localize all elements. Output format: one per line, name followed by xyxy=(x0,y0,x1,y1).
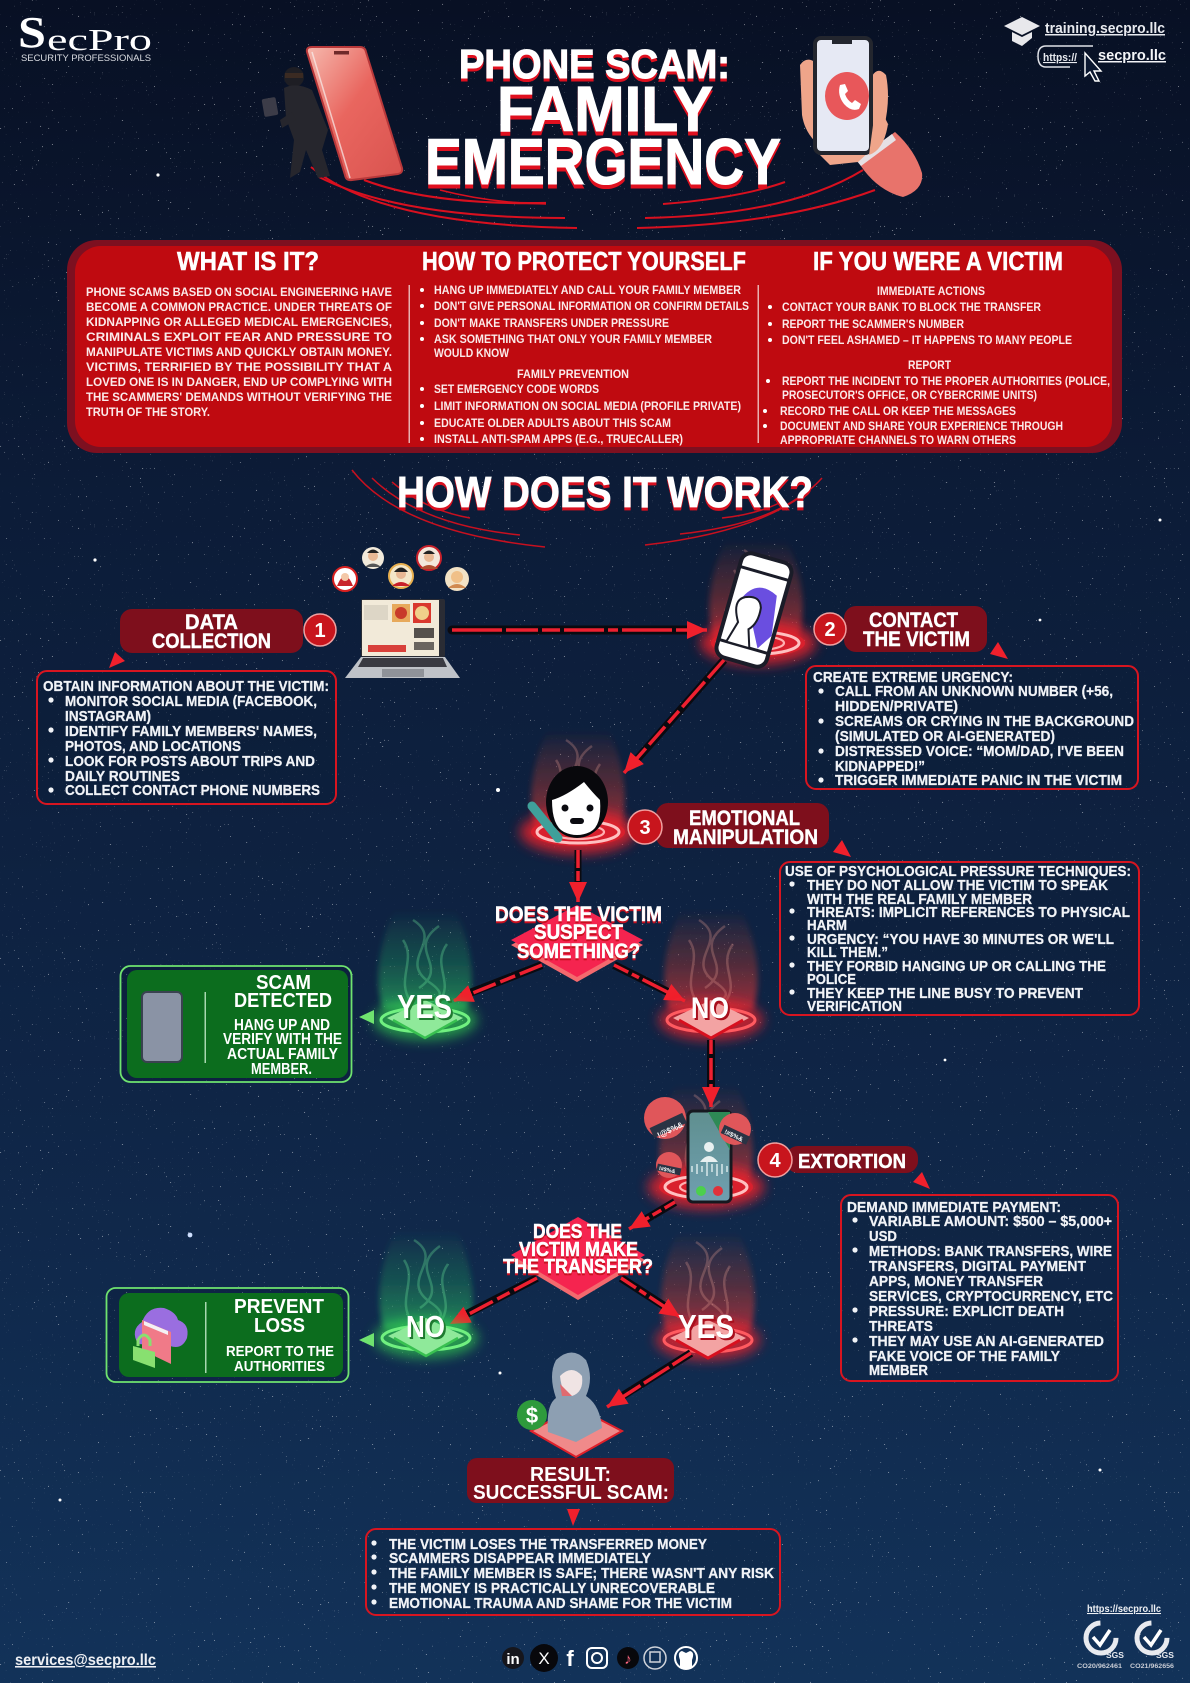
title xyxy=(425,41,781,198)
icon: x: X xyxy=(538,1649,550,1668)
column: how to protect yourself: SET EMERGENCY CODE WORDS xyxy=(434,384,599,396)
icon: browser url box xyxy=(1038,46,1093,67)
website links: https:// xyxy=(1043,52,1077,64)
title: FAMILY xyxy=(497,73,713,145)
result label: SUCCESSFUL SCAM: xyxy=(473,1482,669,1504)
column: if you were a victim: DON'T FEEL ASHAMED – IT HAPPENS TO MANY PEOPLE xyxy=(782,335,1072,347)
step 1 label: data collection: COLLECTION xyxy=(152,630,271,653)
panel: scam detected: MEMBER. xyxy=(251,1061,312,1078)
column: how to protect yourself: INSTALL ANTI-SPAM APPS (E.G., TRUECALLER) xyxy=(434,434,683,446)
column: what is it: THE SCAMMERS' DEMANDS WITHOUT VERIFYING THE xyxy=(86,392,392,404)
number badge 1: 1 xyxy=(314,620,326,642)
text box: step 4 details: PRESSURE: EXPLICIT DEATH xyxy=(869,1303,1064,1320)
contact email: services@secpro.llc xyxy=(15,1652,156,1669)
column: if you were a victim: REPORT THE SCAMMER'S NUMBER xyxy=(782,319,965,331)
decorative arcs under title xyxy=(311,167,875,228)
arrow: no to extortion xyxy=(707,1040,715,1107)
text box: step 2 details: HIDDEN/PRIVATE) xyxy=(835,698,958,715)
icon: linkedin: in xyxy=(506,1651,520,1668)
column: how to protect yourself: LIMIT INFORMATION ON SOCIAL MEDIA (PROFILE PRIVATE) xyxy=(434,401,741,413)
column: what is it xyxy=(86,246,392,419)
step 2 label: contact the victim xyxy=(814,606,987,652)
step 1 label: data collection xyxy=(120,609,336,653)
text box: step 3 details xyxy=(780,862,1139,1015)
icon: hooded scammer with money xyxy=(517,1352,622,1457)
text box: step 2 details: KIDNAPPED!” xyxy=(835,758,925,775)
text box: step 4 details: VARIABLE AMOUNT: $500 – $5,000+ xyxy=(869,1213,1112,1230)
text box: step 3 details: VERIFICATION xyxy=(807,998,902,1015)
social media icons xyxy=(502,1644,697,1672)
text box: step 3 details: THREATS: IMPLICIT REFERENCES TO PHYSICAL xyxy=(807,904,1130,921)
result label: RESULT: xyxy=(530,1464,611,1486)
step 3 label: emotional manipulation xyxy=(628,803,829,849)
badge 2 xyxy=(1130,1623,1174,1670)
decision: does the victim suspect something: DOES THE VICTIM xyxy=(495,903,662,926)
column: if you were a victim: REPORT xyxy=(908,360,951,372)
panel: prevent loss: AUTHORITIES xyxy=(234,1358,325,1375)
text box: step 2 details: DISTRESSED VOICE: “MOM/DAD, I'VE BEEN xyxy=(835,743,1124,760)
text box: step 4 details: APPS, MONEY TRANSFER xyxy=(869,1273,1043,1290)
pointer: step 1 xyxy=(109,652,125,668)
text box: step 3 details: THEY FORBID HANGING UP OR CALLING THE xyxy=(807,958,1106,975)
angry faces: !#$%& xyxy=(658,1166,676,1175)
text box: result details: SCAMMERS DISAPPEAR IMMEDIATELY xyxy=(389,1550,651,1567)
certifications xyxy=(1077,1603,1174,1670)
text box: step 4 details: FAKE VOICE OF THE FAMILY xyxy=(869,1348,1060,1365)
column: how to protect yourself: FAMILY PREVENTION xyxy=(517,369,629,381)
outcome node: no: NO xyxy=(691,992,729,1025)
text box: step 1 details: IDENTIFY FAMILY MEMBERS' NAMES, xyxy=(65,723,317,740)
arrow: extortion to transfer decision xyxy=(629,1202,675,1229)
icon: mouse cursor xyxy=(1085,53,1101,81)
icon: facebook: f xyxy=(566,1646,574,1671)
website links xyxy=(1004,17,1166,81)
arrows: second decision branches xyxy=(450,1278,680,1324)
giant phone xyxy=(307,47,402,180)
icon: graduation cap xyxy=(1004,17,1040,46)
column: if you were a victim: RECORD THE CALL OR KEEP THE MESSAGES xyxy=(780,406,1016,418)
panel: prevent loss: LOSS xyxy=(254,1315,305,1337)
title: EMERGENCY xyxy=(425,125,781,198)
text box: step 3 details: KILL THEM.” xyxy=(807,944,888,961)
text box: step 2 details: SCREAMS OR CRYING IN THE BACKGROUND xyxy=(835,713,1134,730)
arrow: yes to scammer xyxy=(607,1353,691,1407)
decision: does the victim make the transfer: DOES THE xyxy=(533,1221,622,1243)
column: what is it: BECOME A COMMON PRACTICE. UNDER THREATS OF xyxy=(86,302,392,314)
scammer figure xyxy=(262,67,330,178)
text box: step 1 details: COLLECT CONTACT PHONE NUMBERS xyxy=(65,782,320,799)
panel: prevent loss: PREVENT xyxy=(234,1296,324,1318)
decision: does the victim suspect something xyxy=(495,903,662,982)
website links: training.secpro.llc xyxy=(1045,20,1165,37)
logo: SecPro: SECURITY PROFESSIONALS xyxy=(21,53,151,64)
text box: step 1 details xyxy=(37,671,336,804)
column: how to protect yourself: EDUCATE OLDER ADULTS ABOUT THIS SCAM xyxy=(434,418,671,430)
pointer: to scam detected xyxy=(359,1010,374,1024)
angry faces: !#$%& xyxy=(723,1129,744,1144)
palm and fingers xyxy=(800,60,888,165)
step 4 label: extortion: EXTORTION xyxy=(798,1151,906,1173)
icon: laptop with data dashboard xyxy=(345,599,460,678)
column: if you were a victim: IMMEDIATE ACTIONS xyxy=(877,286,985,298)
heading: how does it work: HOW DOES IT WORK? xyxy=(397,468,813,517)
title: PHONE SCAM: xyxy=(459,41,730,87)
outcome node: yes xyxy=(373,988,477,1040)
column: how to protect yourself: DON'T GIVE PERSONAL INFORMATION OR CONFIRM DETAILS xyxy=(434,301,749,313)
panel: scam detected: ACTUAL FAMILY xyxy=(227,1046,339,1063)
number badge 1 xyxy=(304,614,336,646)
angry faces xyxy=(644,1097,751,1178)
call button xyxy=(825,72,869,120)
text box: step 3 details: THEY KEEP THE LINE BUSY TO PREVENT xyxy=(807,985,1083,1002)
badge 2: CO21/962656 xyxy=(1130,1663,1174,1670)
step 3 label: emotional manipulation: MANIPULATION xyxy=(673,826,818,849)
icon: phone call with angry threats xyxy=(644,1097,751,1202)
badge 2: SGS xyxy=(1156,1650,1174,1660)
text box: step 2 details: CALL FROM AN UNKNOWN NUMBER (+56, xyxy=(835,683,1113,700)
text box: result details: THE FAMILY MEMBER IS SAFE; THERE WASN'T ANY RISK xyxy=(389,1565,774,1582)
text box: step 3 details: URGENCY: “YOU HAVE 30 MINUTES OR WE'LL xyxy=(807,931,1114,948)
column: if you were a victim: CONTACT YOUR BANK TO BLOCK THE TRANSFER xyxy=(782,302,1042,314)
step 1 label: data collection: DATA xyxy=(185,611,238,634)
text box: result details xyxy=(366,1529,780,1615)
decision: does the victim make the transfer: VICTIM MAKE xyxy=(519,1239,638,1261)
column: how to protect yourself: HANG UP IMMEDIATELY AND CALL YOUR FAMILY MEMBER xyxy=(434,285,742,297)
step 3 label: emotional manipulation: EMOTIONAL xyxy=(689,807,800,830)
text box: step 4 details: TRANSFERS, DIGITAL PAYMENT xyxy=(869,1258,1086,1275)
decision: does the victim make the transfer xyxy=(503,1217,653,1300)
icon: phone xyxy=(142,992,182,1062)
text box: step 3 details: THEY DO NOT ALLOW THE VICTIM TO SPEAK xyxy=(807,877,1108,894)
column: if you were a victim: IF YOU WERE A VICTIM xyxy=(813,246,1063,276)
panel: scam detected: VERIFY WITH THE xyxy=(223,1031,342,1048)
number badge 4 xyxy=(758,1143,792,1177)
icon: github xyxy=(675,1647,697,1669)
column: how to protect yourself: ASK SOMETHING THAT ONLY YOUR FAMILY MEMBER xyxy=(434,334,713,346)
column: what is it: TRUTH OF THE STORY. xyxy=(86,407,210,419)
column: how to protect yourself: WOULD KNOW xyxy=(434,348,509,360)
icon: tiktok: ♪ xyxy=(624,1651,632,1668)
panel: scam detected: SCAM xyxy=(256,972,311,994)
logo: SecPro xyxy=(18,8,152,64)
column: if you were a victim: DOCUMENT AND SHARE YOUR EXPERIENCE THROUGH xyxy=(780,421,1063,433)
outcome node: yes: YES xyxy=(397,988,452,1025)
dollar badge: $ xyxy=(526,1403,538,1428)
column: how to protect yourself: HOW TO PROTECT YOURSELF xyxy=(422,246,746,276)
outcome node: no (transfer): NO xyxy=(406,1309,445,1344)
sleeve xyxy=(857,132,922,197)
text box: step 2 details xyxy=(806,666,1138,789)
pointer: step 3 xyxy=(833,840,851,857)
column: if you were a victim: PROSECUTOR'S OFFICE, OR CYBERCRIME UNITS) xyxy=(782,390,1037,402)
panel: scam detected: HANG UP AND xyxy=(234,1017,330,1034)
text box: step 4 details xyxy=(841,1195,1118,1381)
illustration: hand holding phone with call icon xyxy=(800,38,922,197)
text box: step 3 details: POLICE xyxy=(807,971,856,988)
column: what is it: KIDNAPPING OR ALLEGED MEDICAL EMERGENCIES, xyxy=(86,317,392,329)
auras and rings behind nodes xyxy=(378,540,816,1332)
column: how to protect yourself xyxy=(420,246,749,446)
column: if you were a victim: REPORT THE INCIDENT TO THE PROPER AUTHORITIES (POLICE, xyxy=(782,376,1110,388)
text box: step 3 details: USE OF PSYCHOLOGICAL PRESSURE TECHNIQUES: xyxy=(785,863,1131,880)
step 4 label: extortion xyxy=(758,1143,918,1177)
text box: step 4 details: USD xyxy=(869,1228,897,1245)
icon: x xyxy=(530,1644,558,1672)
decision: does the victim suspect something: SOMETHING? xyxy=(517,940,640,963)
decision: does the victim suspect something: SUSPECT xyxy=(534,921,623,944)
logo: SecPro: S xyxy=(18,8,46,57)
number badge 2: 2 xyxy=(824,619,836,641)
badge 1 xyxy=(1077,1623,1124,1670)
arrow: phone to victim xyxy=(624,660,724,773)
column: if you were a victim: APPROPRIATE CHANNELS TO WARN OTHERS xyxy=(780,435,1016,447)
panel: scam detected: DETECTED xyxy=(234,990,332,1012)
pointer: step 4 xyxy=(913,1172,930,1189)
angry faces: !@$%& xyxy=(656,1120,685,1140)
step 2 label: contact the victim: THE VICTIM xyxy=(863,628,970,651)
pointer: result xyxy=(567,1509,580,1526)
text box: step 1 details: OBTAIN INFORMATION ABOUT THE VICTIM: xyxy=(43,678,329,695)
pointer: to prevent loss xyxy=(359,1333,374,1347)
text box: step 2 details: TRIGGER IMMEDIATE PANIC IN THE VICTIM xyxy=(835,772,1122,789)
column: how to protect yourself: DON'T MAKE TRANSFERS UNDER PRESSURE xyxy=(434,318,669,330)
arrow: laptop to phone xyxy=(452,626,707,634)
icon: instagram xyxy=(587,1648,607,1668)
text box: step 1 details: DAILY ROUTINES xyxy=(65,768,180,785)
arrows: first decision branches xyxy=(453,965,685,1001)
text box: step 3 details: WITH THE REAL FAMILY MEMBER xyxy=(807,891,1032,908)
number badge 4: 4 xyxy=(769,1150,781,1172)
text box: step 2 details: CREATE EXTREME URGENCY: xyxy=(813,669,1013,686)
text box: step 4 details: MEMBER xyxy=(869,1362,928,1379)
decision: does the victim make the transfer: THE TRANSFER? xyxy=(503,1256,653,1278)
outcome node: yes (transfer) xyxy=(656,1308,760,1360)
column: if you were a victim xyxy=(763,246,1110,447)
text box: step 3 details: HARM xyxy=(807,917,847,934)
outcome node: no xyxy=(659,992,763,1040)
icon: frightened victim on phone xyxy=(532,766,608,838)
icon: cloud, folder and padlock xyxy=(133,1308,188,1368)
text box: step 2 details: (SIMULATED OR AI-GENERATED) xyxy=(835,728,1055,745)
icons: family member avatars xyxy=(333,546,469,591)
panel: info panel xyxy=(67,240,1122,453)
text box: step 4 details: SERVICES, CRYPTOCURRENCY, ETC xyxy=(869,1288,1113,1305)
icon: phone with caller xyxy=(714,551,794,669)
text box: step 1 details: MONITOR SOCIAL MEDIA (FACEBOOK, xyxy=(65,693,317,710)
decorative arcs around section heading xyxy=(352,470,822,547)
outcome node: yes (transfer): YES xyxy=(678,1308,734,1345)
text box: step 1 details: LOOK FOR POSTS ABOUT TRIPS AND xyxy=(65,753,315,770)
text box: result details: EMOTIONAL TRAUMA AND SHAME FOR THE VICTIM xyxy=(389,1595,732,1612)
text box: result details: THE VICTIM LOSES THE TRANSFERRED MONEY xyxy=(389,1536,707,1553)
column: what is it: LOVED ONE IS IN DANGER, END UP COMPLYING WITH xyxy=(86,377,392,389)
illustration: scammer behind giant phone xyxy=(262,47,402,180)
outcome node: no (transfer) xyxy=(374,1309,478,1358)
pointer: step 2 xyxy=(990,642,1008,659)
column: what is it: PHONE SCAMS BASED ON SOCIAL ENGINEERING HAVE xyxy=(86,287,392,299)
badge 1: SGS xyxy=(1106,1650,1124,1660)
number badge 2 xyxy=(814,613,846,645)
text box: step 4 details: THEY MAY USE AN AI-GENERATED xyxy=(869,1333,1104,1350)
text box: step 1 details: INSTAGRAM) xyxy=(65,708,151,725)
column: what is it: MANIPULATE VICTIMS AND QUICKLY OBTAIN MONEY. xyxy=(86,347,392,359)
column: what is it: VICTIMS, TERRIFIED BY THE POSSIBILITY THAT A xyxy=(86,362,392,374)
text box: step 4 details: THREATS xyxy=(869,1318,933,1335)
certifications: https://secpro.llc xyxy=(1087,1603,1161,1615)
column: what is it: WHAT IS IT? xyxy=(177,246,319,276)
text box: step 1 details: PHOTOS, AND LOCATIONS xyxy=(65,738,241,755)
text box: result details: THE MONEY IS PRACTICALLY UNRECOVERABLE xyxy=(389,1580,715,1597)
panel: prevent loss: REPORT TO THE xyxy=(226,1343,334,1360)
number badge 3 xyxy=(628,810,662,844)
column: what is it: CRIMINALS EXPLOIT FEAR AND PRESSURE TO xyxy=(86,332,392,344)
phone xyxy=(815,38,871,153)
text box: step 4 details: METHODS: BANK TRANSFERS, WIRE xyxy=(869,1243,1112,1260)
arrow: victim to decision xyxy=(574,850,582,902)
website links: secpro.llc xyxy=(1098,47,1166,64)
panel: scam detected xyxy=(120,966,352,1082)
icon: linkedin xyxy=(502,1647,524,1669)
step 2 label: contact the victim: CONTACT xyxy=(869,609,958,632)
number badge 3: 3 xyxy=(639,817,651,839)
icon: twitch xyxy=(644,1647,666,1669)
icon: tiktok xyxy=(617,1647,639,1669)
result label xyxy=(467,1458,674,1504)
logo: SecPro: ecPro xyxy=(47,22,152,57)
text box: step 4 details: DEMAND IMMEDIATE PAYMENT: xyxy=(847,1199,1061,1216)
badge 1: CO20/962461 xyxy=(1077,1663,1122,1670)
panel: prevent loss xyxy=(106,1288,348,1382)
